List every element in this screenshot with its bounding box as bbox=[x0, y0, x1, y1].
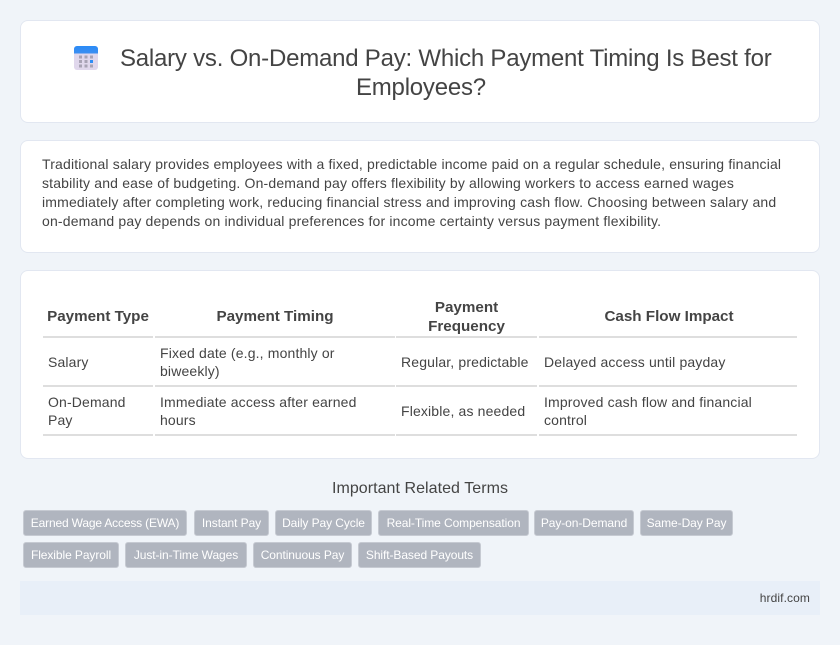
tag: Pay-on-Demand bbox=[541, 516, 627, 530]
table row: salary bbox=[48, 345, 726, 379]
tag: Instant Pay bbox=[202, 516, 261, 530]
table row: on-demand pay: On-Demand bbox=[48, 394, 126, 410]
table row: on-demand pay: hours bbox=[160, 412, 196, 428]
text block: introduction: Traditional salary provides employees with a fixed, predictable income paid on a regular schedule, ensuring financial bbox=[42, 156, 781, 172]
text block: introduction: stability and ease of budgeting. On-demand pay offers flexibility by allowing workers to access earned wages bbox=[42, 175, 734, 191]
text block: introduction bbox=[42, 156, 781, 229]
panel: comparison table bbox=[20, 270, 820, 459]
table row: on-demand pay bbox=[48, 394, 752, 428]
tag bbox=[125, 542, 247, 568]
tag: Real-Time Compensation bbox=[387, 516, 520, 530]
table row: salary: biweekly) bbox=[160, 363, 220, 379]
tag bbox=[358, 542, 481, 568]
tag bbox=[378, 510, 529, 536]
table row: on-demand pay: Flexible, as needed bbox=[401, 403, 525, 419]
heading: important related terms: Important Related Terms bbox=[332, 480, 508, 497]
panel: related terms tags bbox=[23, 510, 733, 568]
tag bbox=[23, 542, 119, 568]
tag bbox=[640, 510, 733, 536]
tag: Daily Pay Cycle bbox=[282, 516, 365, 530]
panel: header bbox=[20, 20, 820, 123]
tag: Shift-Based Payouts bbox=[366, 548, 473, 562]
text block: introduction: on-demand pay depends on individual preferences for income certainty versus payment flexibility. bbox=[42, 213, 661, 229]
tag bbox=[534, 510, 634, 536]
table row: salary: Fixed date (e.g., monthly or bbox=[160, 345, 335, 361]
table row: on-demand pay: Pay bbox=[48, 412, 73, 428]
table header row: Frequency bbox=[428, 318, 505, 335]
tag: Earned Wage Access (EWA) bbox=[31, 516, 179, 530]
tag bbox=[253, 542, 352, 568]
footer bar bbox=[20, 581, 820, 615]
table row: on-demand pay: Improved cash flow and financial bbox=[544, 394, 752, 410]
table header row bbox=[47, 299, 734, 335]
title: Employees? bbox=[356, 74, 486, 101]
text block: introduction: immediately after completing work, reducing financial stress and improving cash flow. Choosing between salary and bbox=[42, 194, 776, 210]
table header row: Payment Type bbox=[47, 308, 149, 325]
table header row: Payment Timing bbox=[216, 308, 334, 325]
table row: salary: Regular, predictable bbox=[401, 354, 529, 370]
table header row: Cash Flow Impact bbox=[604, 308, 734, 325]
icon: calendar bbox=[74, 46, 98, 70]
tag: Just-in-Time Wages bbox=[134, 548, 238, 562]
footer source text: hrdif.com bbox=[760, 591, 810, 605]
tag bbox=[194, 510, 269, 536]
tag bbox=[275, 510, 372, 536]
tag: Same-Day Pay bbox=[647, 516, 726, 530]
table row: on-demand pay: Immediate access after earned bbox=[160, 394, 357, 410]
title: Salary vs. On-Demand Pay: Which Payment Timing Is Best for bbox=[120, 45, 771, 72]
panel: introduction text bbox=[20, 140, 820, 253]
table header row: Payment bbox=[435, 299, 498, 316]
table row: salary: Salary bbox=[48, 354, 89, 370]
table row: on-demand pay: control bbox=[544, 412, 587, 428]
tag: Flexible Payroll bbox=[31, 548, 111, 562]
table row: salary: Delayed access until payday bbox=[544, 354, 725, 370]
tag bbox=[23, 510, 187, 536]
tag: Continuous Pay bbox=[261, 548, 344, 562]
title bbox=[120, 45, 772, 101]
